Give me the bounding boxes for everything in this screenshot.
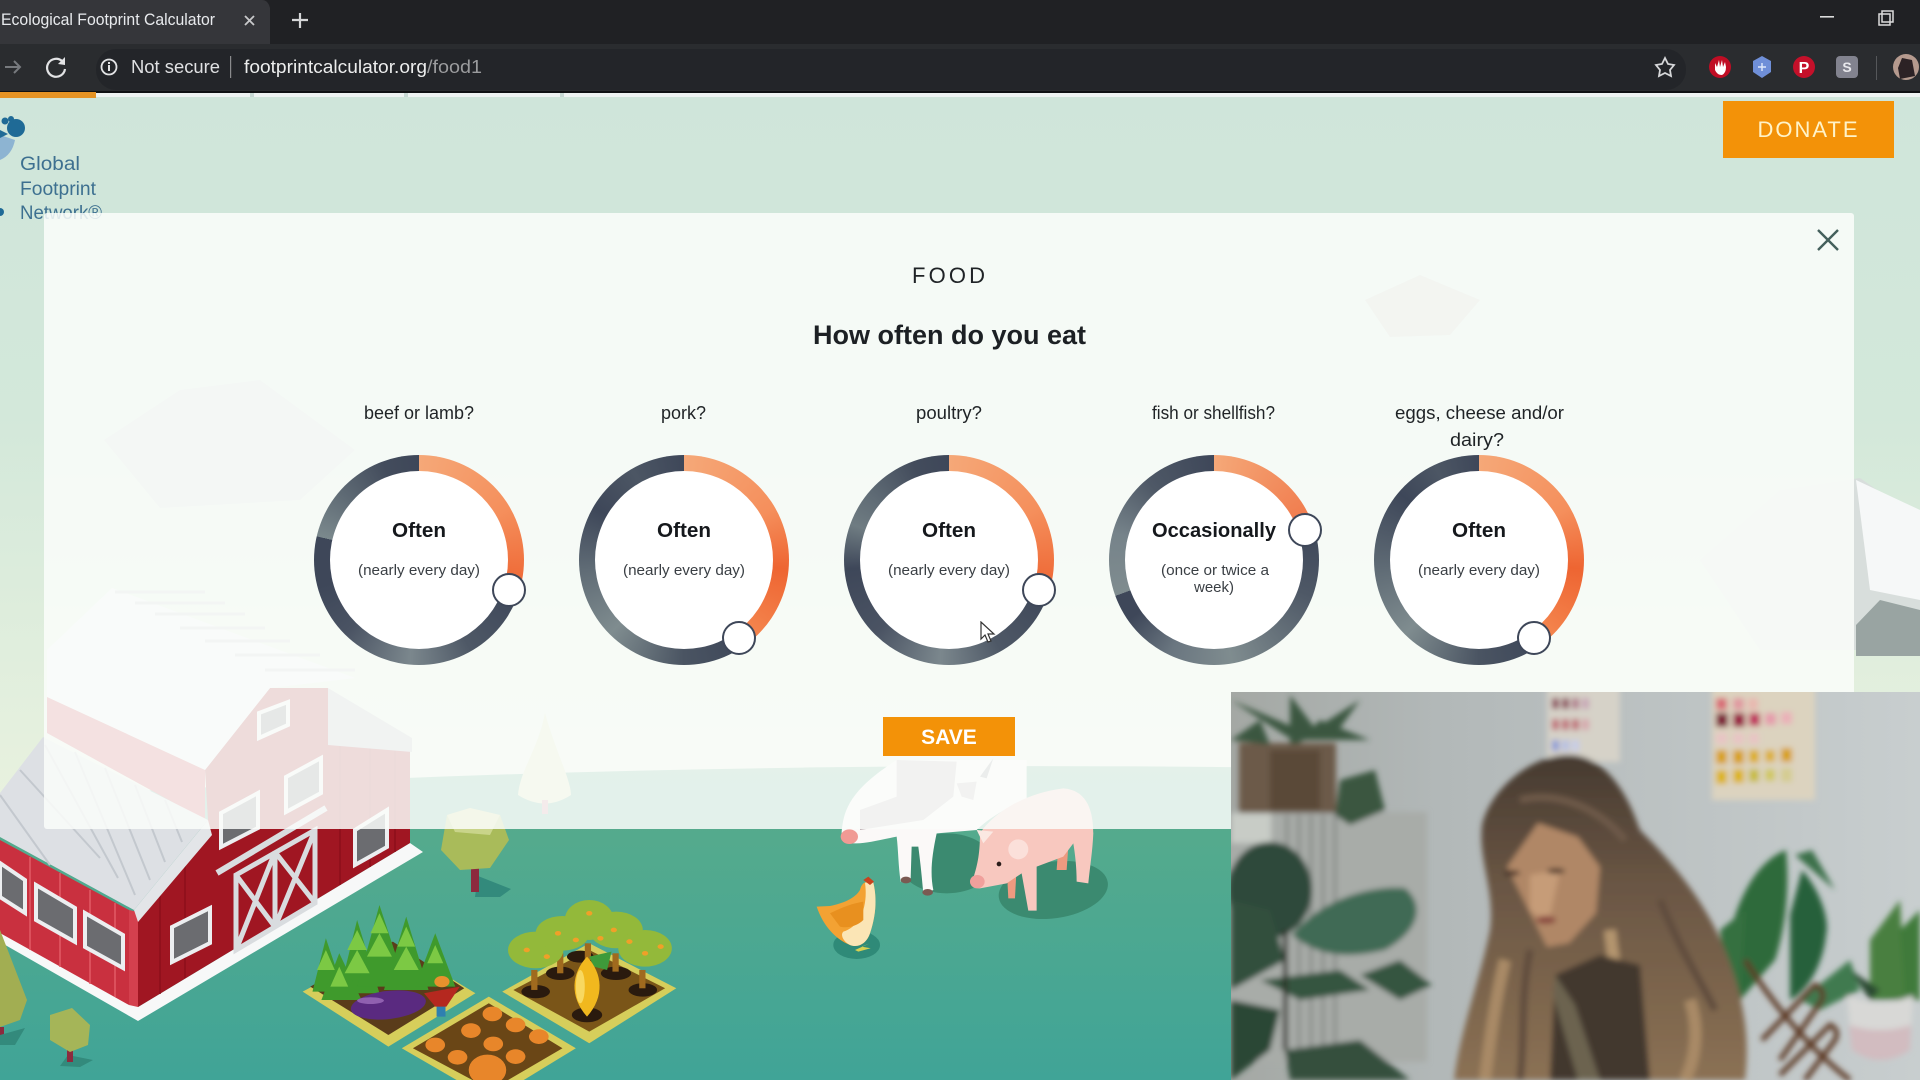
button: save bbox=[883, 717, 1015, 756]
small tree bbox=[50, 1008, 93, 1067]
webcam video: presenter bbox=[1231, 692, 1920, 1080]
radiator bbox=[1231, 812, 1427, 1062]
question labels: beef or lamb? bbox=[364, 403, 474, 423]
button: donate bbox=[1723, 101, 1894, 158]
pumpkin bed bbox=[402, 997, 576, 1080]
fiddle leaf plant bbox=[1228, 842, 1432, 1080]
dial: pork: Often bbox=[657, 520, 711, 542]
dial: eggs, cheese and/or dairy: (nearly every day) bbox=[1418, 562, 1540, 579]
progress bar bbox=[0, 92, 96, 98]
clouds bbox=[104, 275, 1920, 656]
browser tab bbox=[0, 0, 270, 44]
extension icons bbox=[1709, 54, 1919, 80]
heading: How often do you eat: How often do you eat bbox=[813, 320, 1086, 350]
vegetable garden beds bbox=[303, 900, 676, 1080]
dial: fish or shellfish bbox=[1109, 455, 1319, 665]
question labels: dairy? bbox=[1450, 430, 1504, 450]
dial: eggs, cheese and/or dairy bbox=[1374, 455, 1584, 665]
browser chrome bbox=[0, 0, 1920, 98]
address bar bbox=[96, 49, 1686, 90]
rattan chair bbox=[1745, 960, 1850, 1080]
plant: right bbox=[1720, 850, 1920, 1020]
logo: Global Footprint Network: Global bbox=[20, 154, 80, 175]
window controls bbox=[1820, 11, 1893, 25]
browser tab: Ecological Footprint Calculator bbox=[1, 11, 215, 29]
potted plant: top left bbox=[1231, 695, 1385, 825]
button: save: SAVE bbox=[921, 726, 977, 749]
question labels bbox=[364, 403, 1564, 450]
barn bbox=[0, 588, 423, 1021]
dial: fish or shellfish: (once or twice a bbox=[1161, 562, 1270, 579]
dial: fish or shellfish: week) bbox=[1193, 579, 1234, 596]
poster right bbox=[1712, 686, 1815, 800]
dial: fish or shellfish: Occasionally bbox=[1152, 520, 1277, 542]
icon: bookmark star bbox=[1656, 58, 1674, 76]
dial: poultry: (nearly every day) bbox=[888, 562, 1010, 579]
address bar: /food1 bbox=[427, 57, 482, 77]
ground bbox=[0, 766, 1920, 1080]
panel: food questionnaire bbox=[44, 213, 1854, 829]
pig bbox=[970, 788, 1093, 911]
dial: pork bbox=[579, 455, 789, 665]
question labels: pork? bbox=[661, 403, 706, 423]
button: donate: DONATE bbox=[1757, 117, 1860, 142]
icon: new tab bbox=[292, 13, 308, 28]
icon: forward arrow bbox=[5, 61, 20, 73]
presenter face bbox=[1507, 823, 1600, 947]
logo: Global Footprint Network: Footprint bbox=[20, 179, 97, 200]
icon: reload bbox=[47, 57, 65, 77]
poster left bbox=[1547, 686, 1620, 762]
faded pine tree bbox=[518, 713, 571, 814]
tree bbox=[441, 808, 511, 897]
question labels: eggs, cheese and/or bbox=[1395, 403, 1564, 423]
chicken bbox=[817, 877, 876, 952]
animal shadows bbox=[833, 833, 1112, 959]
cow, pig and chicken bbox=[817, 758, 1112, 959]
fruit tree bed bbox=[502, 900, 676, 1043]
address bar: Not secure bbox=[131, 57, 220, 77]
dial: beef or lamb bbox=[314, 455, 524, 665]
presenter shirt bbox=[1550, 955, 1650, 1080]
cow bbox=[841, 758, 1027, 896]
eggplant bed bbox=[303, 905, 475, 1047]
dial: poultry: Often bbox=[922, 520, 976, 542]
question labels: fish or shellfish? bbox=[1152, 403, 1275, 423]
dial: poultry bbox=[844, 455, 1054, 665]
dial: pork: (nearly every day) bbox=[623, 562, 745, 579]
logo: Global Footprint Network bbox=[0, 116, 102, 224]
presenter hair bbox=[1454, 755, 1747, 1080]
logo: Global Footprint Network: Network® bbox=[20, 203, 102, 224]
barn door bbox=[217, 808, 326, 950]
dial: beef or lamb: (nearly every day) bbox=[358, 562, 480, 579]
address bar: footprintcalculator.org bbox=[244, 57, 427, 77]
heading: FOOD: FOOD bbox=[912, 263, 985, 288]
icon: close bbox=[1817, 229, 1839, 251]
plant pot bbox=[1847, 995, 1913, 1060]
icon: mouse cursor bbox=[980, 621, 996, 643]
question labels: poultry? bbox=[916, 403, 982, 423]
cone tree bbox=[0, 930, 27, 1045]
extension icons: S bbox=[1842, 59, 1852, 75]
dial: eggs, cheese and/or dairy: Often bbox=[1452, 520, 1506, 542]
extension icons: P bbox=[1799, 60, 1810, 77]
dial: beef or lamb: Often bbox=[392, 520, 446, 542]
